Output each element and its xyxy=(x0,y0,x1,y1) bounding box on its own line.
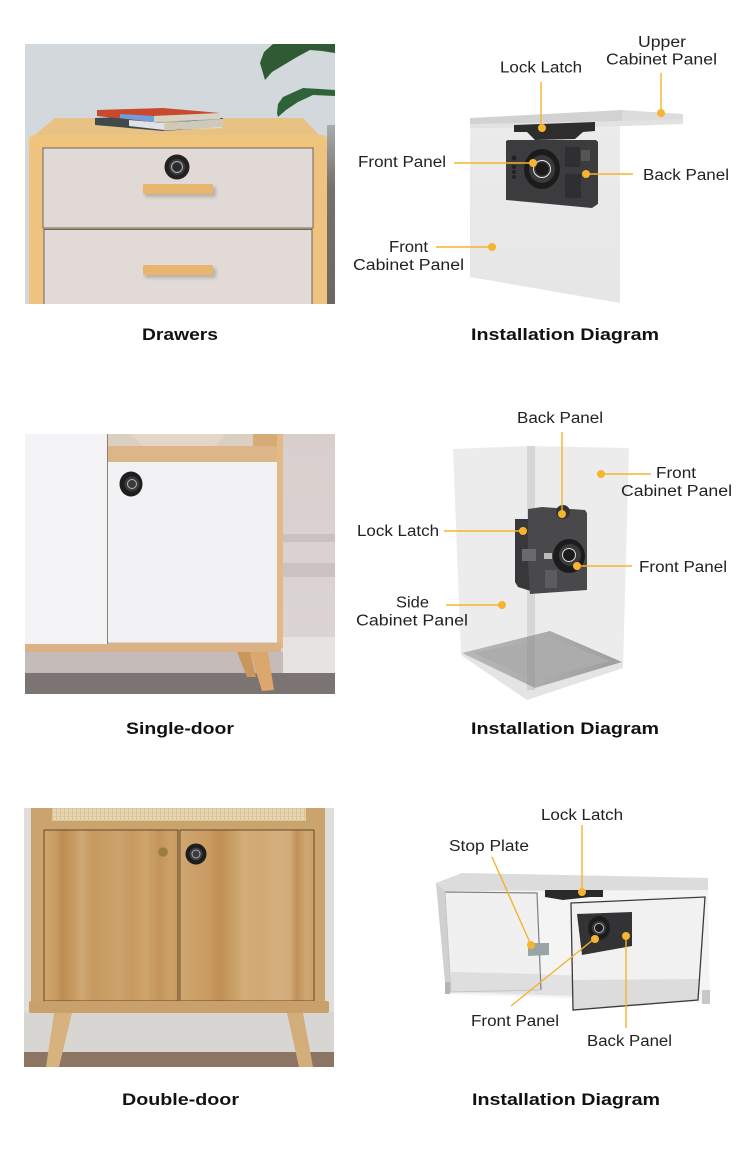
lock latch plate xyxy=(515,519,537,593)
photo: single-door cabinet with lock xyxy=(25,434,335,694)
callout: side cabinet panel xyxy=(356,594,506,630)
lock latch part xyxy=(545,890,603,900)
rattan panel xyxy=(52,808,306,821)
panel: drawers row xyxy=(25,34,729,344)
icon: lock knob xyxy=(164,154,190,180)
upper cabinet panel xyxy=(470,110,683,128)
transparent cabinet box xyxy=(436,873,710,1004)
wall moulding xyxy=(283,534,335,674)
lock latch part xyxy=(514,122,595,140)
callout: side cabinet panel: Cabinet Panel xyxy=(356,612,468,630)
callout: front cabinet panel: Front xyxy=(656,465,697,482)
callout: front cabinet panel xyxy=(597,465,732,500)
photo: double-door cabinet with lock xyxy=(24,808,334,1067)
diagram: double-door installation xyxy=(436,807,710,1050)
doors xyxy=(25,434,277,644)
icon: plant leaves xyxy=(260,44,335,117)
wall and floor below cabinet xyxy=(25,652,335,694)
callout: side cabinet panel: Side xyxy=(396,594,429,612)
callout: lock latch: Lock Latch xyxy=(357,523,439,540)
photo: drawer cabinet with lock xyxy=(25,44,335,314)
heading: installation diagram: Installation Diagram xyxy=(471,719,659,738)
callout: back panel: Back Panel xyxy=(643,167,729,184)
callout: back panel xyxy=(587,932,672,1050)
callout: front cabinet panel: Front xyxy=(389,239,429,256)
right door frame xyxy=(571,897,705,1010)
books xyxy=(95,108,223,131)
base rail xyxy=(29,1001,329,1013)
drawer fronts xyxy=(43,148,313,314)
panel: double-door row xyxy=(24,807,710,1109)
callout: front panel: Front Panel xyxy=(358,154,446,171)
callout: upper cabinet panel: Cabinet Panel xyxy=(606,52,717,68)
lock body xyxy=(506,140,598,208)
callout: upper cabinet panel xyxy=(606,34,717,117)
icon: lock knob xyxy=(120,472,142,496)
cabinet body xyxy=(31,808,325,1002)
panel: single-door row xyxy=(25,410,732,738)
diagram: drawers installation xyxy=(353,34,729,303)
callout: lock latch xyxy=(541,807,623,896)
callout: stop plate: Stop Plate xyxy=(449,838,529,855)
cabinet top xyxy=(29,118,327,147)
heading: installation diagram: Installation Diagram xyxy=(472,1090,660,1109)
callout: front panel xyxy=(358,154,537,171)
callout: front panel: Front Panel xyxy=(639,559,727,576)
callout: lock latch xyxy=(500,60,582,132)
transparent cabinet box xyxy=(453,446,629,700)
stop plate xyxy=(528,943,549,956)
lock body xyxy=(577,912,632,955)
icon: lock knob xyxy=(186,844,206,864)
heading: Double-door: Double-door xyxy=(122,1090,239,1109)
callout: lock latch: Lock Latch xyxy=(541,807,623,824)
callout: front panel: Front Panel xyxy=(471,1013,559,1030)
callout: front cabinet panel: Cabinet Panel xyxy=(353,257,464,274)
callout: back panel xyxy=(582,167,729,184)
front cabinet panel xyxy=(470,125,620,303)
callout: lock latch: Lock Latch xyxy=(500,60,582,76)
shelf interior xyxy=(108,434,278,462)
callout: front panel xyxy=(573,559,727,576)
lock body xyxy=(522,505,587,594)
heading: Drawers: Drawers xyxy=(142,325,218,344)
icon: brass knob xyxy=(158,847,168,857)
doors xyxy=(44,830,314,1001)
legs xyxy=(46,1013,313,1067)
heading: Single-door: Single-door xyxy=(126,719,234,738)
callout: lock latch xyxy=(357,523,527,540)
diagram: single-door installation xyxy=(356,410,732,700)
legs xyxy=(237,652,274,691)
callout: front cabinet panel: Cabinet Panel xyxy=(621,483,732,500)
heading: installation diagram: Installation Diagram xyxy=(471,325,659,344)
callout: front cabinet panel xyxy=(353,239,496,274)
callout: back panel: Back Panel xyxy=(587,1033,672,1050)
left door frame xyxy=(445,892,541,992)
callout: back panel: Back Panel xyxy=(517,410,603,427)
callout: upper cabinet panel: Upper xyxy=(638,34,686,51)
handles xyxy=(143,184,216,278)
callout: stop plate xyxy=(449,838,535,949)
cabinet frame xyxy=(25,434,283,652)
callout: front panel xyxy=(471,935,599,1030)
callout: back panel xyxy=(517,410,603,518)
